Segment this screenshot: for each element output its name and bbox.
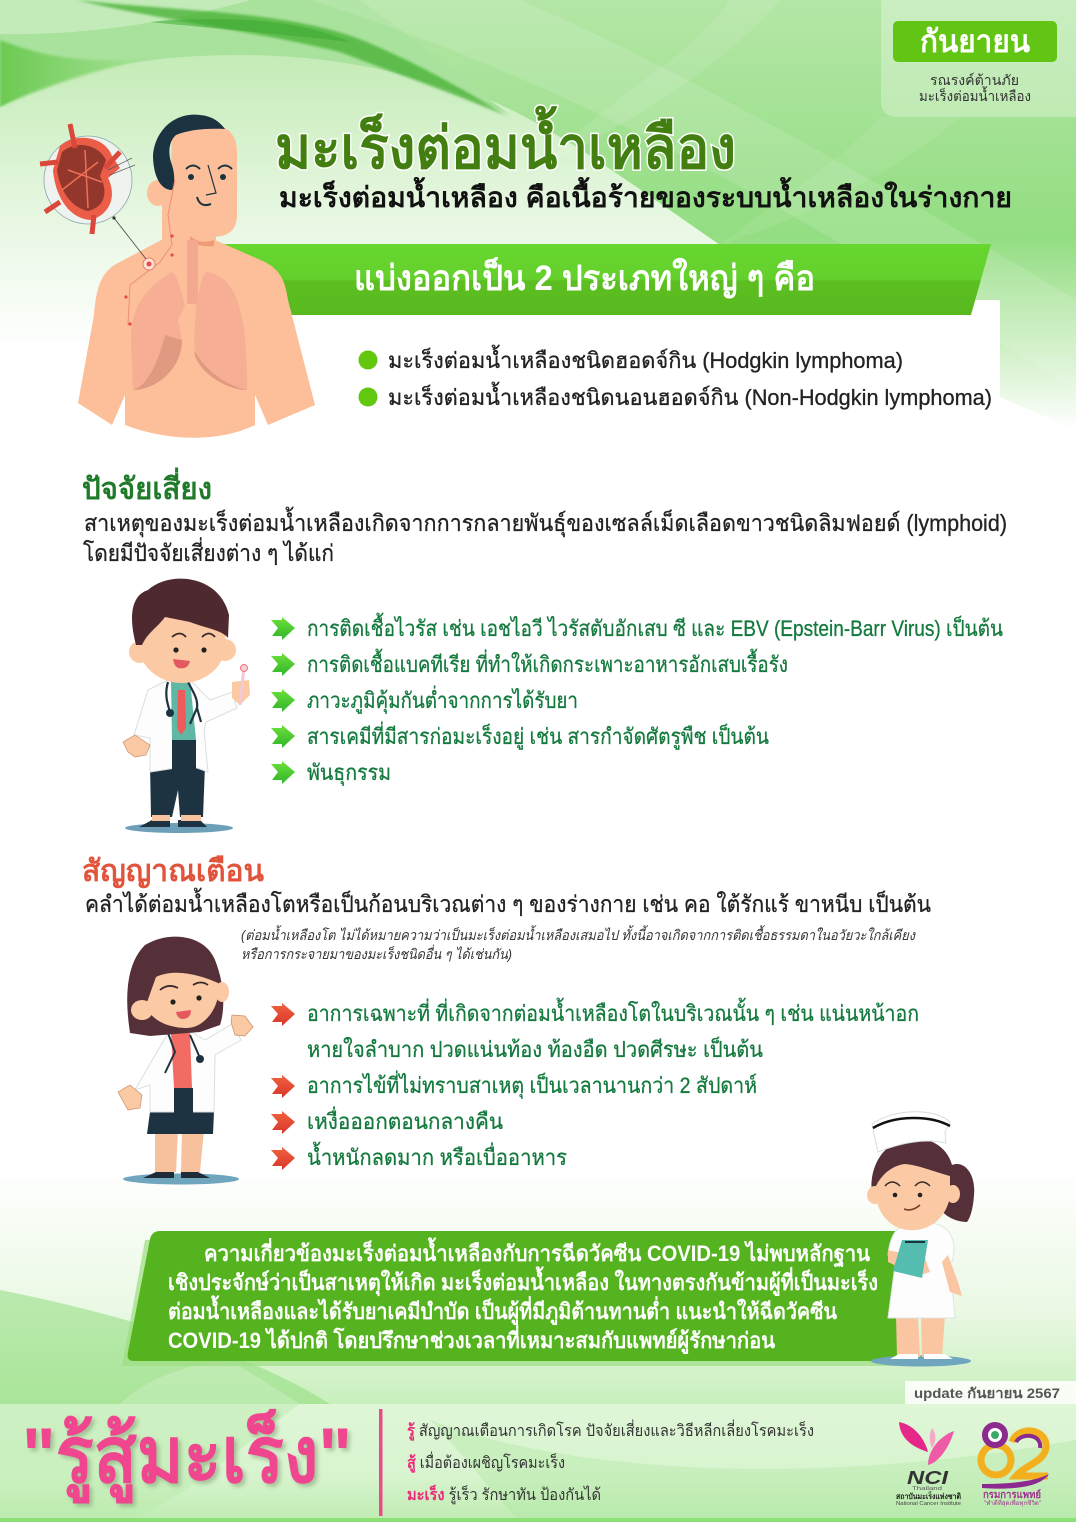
illustration: female doctor bbox=[118, 937, 253, 1184]
slogan: "รู้สู้มะเร็ง" bbox=[22, 1409, 352, 1504]
slogan explanation: สู้ เมื่อต้องเผชิญโรคมะเร็ง bbox=[407, 1451, 565, 1474]
month tab: มะเร็งต่อมน้ำเหลือง bbox=[919, 86, 1031, 104]
warning signs list: อาการเฉพาะที่ ที่เกิดจากต่อมน้ำเหลืองโตในบริเวณนั้น ๆ เช่น แน่นหน้าอก bbox=[307, 998, 919, 1026]
slogan explanation: รู้ สัญญาณเตือนการเกิดโรค ปัจจัยเสี่ยงและวิธีหลีกเลี่ยงโรคมะเร็ง bbox=[407, 1419, 814, 1442]
lymphoma types list: มะเร็งต่อมน้ำเหลืองชนิดนอนฮอดจ์กิน (Non-Hodgkin lymphoma) bbox=[388, 382, 992, 410]
risk factors intro: โดยมีปัจจัยเสี่ยงต่าง ๆ ได้แก่ bbox=[83, 537, 334, 566]
logo: Department of Medical Services 82 bbox=[981, 1425, 1049, 1507]
risk factors list: ภาวะภูมิคุ้มกันต่ำจากการได้รับยา bbox=[307, 685, 578, 714]
subtitle: มะเร็งต่อมน้ำเหลือง คือเนื้อร้ายของระบบน้ำเหลืองในร่างกาย bbox=[279, 176, 1012, 213]
heading: risk factors: ปัจจัยเสี่ยง bbox=[82, 467, 212, 506]
illustration: male doctor bbox=[123, 579, 250, 833]
slogan explanation bbox=[407, 1419, 814, 1505]
warning signs intro: คลำได้ต่อมน้ำเหลืองโตหรือเป็นก้อนบริเวณต่าง ๆ ของร่างกาย เช่น คอ ใต้รักแร้ ขาหนีบ เป็นต้น bbox=[85, 888, 931, 917]
logo: National Cancer Institute: Thailand bbox=[912, 1486, 942, 1492]
warning signs list: น้ำหนักลดมาก หรือเบื่ออาหาร bbox=[307, 1142, 567, 1170]
logo: National Cancer Institute bbox=[896, 1422, 961, 1507]
risk factors list: พันธุกรรม bbox=[307, 760, 391, 786]
callout: COVID-19 vaccine bbox=[122, 1231, 898, 1366]
slogan divider bbox=[379, 1409, 382, 1516]
warning signs list: หายใจลำบาก ปวดแน่นท้อง ท้องอืด ปวดศีรษะ เป็นต้น bbox=[307, 1035, 763, 1062]
callout: COVID-19 vaccine: ความเกี่ยวข้องมะเร็งต่อมน้ำเหลืองกับการฉีดวัคซีน COVID-19 ไม่พบหลักฐาน bbox=[204, 1237, 870, 1268]
warning signs list: เหงื่อออกตอนกลางคืน bbox=[307, 1106, 503, 1134]
warning signs list: อาการไข้ที่ไม่ทราบสาเหตุ เป็นเวลานานกว่า 2 สัปดาห์ bbox=[307, 1070, 757, 1099]
risk factors list: สารเคมีที่มีสารก่อมะเร็งอยู่ เช่น สารกำจัดศัตรูพืช เป็นต้น bbox=[307, 721, 769, 750]
footer band bbox=[0, 1404, 1076, 1522]
warning signs note bbox=[241, 925, 916, 962]
risk factors intro bbox=[83, 507, 1007, 566]
logo: National Cancer Institute: NCI bbox=[907, 1468, 949, 1488]
callout: COVID-19 vaccine: ต่อมน้ำเหลืองและได้รับยาเคมีบำบัด เป็นผู้ที่มีภูมิต้านทานต่ำ แนะนำให้ฉีดวัคซีน bbox=[168, 1295, 837, 1326]
warning signs list bbox=[271, 998, 919, 1170]
month tab bbox=[881, 0, 1076, 117]
title: มะเร็งต่อมน้ำเหลือง bbox=[275, 106, 736, 181]
heading: warning signs: สัญญาณเตือน bbox=[82, 855, 264, 889]
month tab: กันยายน bbox=[920, 24, 1030, 59]
callout: COVID-19 vaccine: เชิงประจักษ์ว่าเป็นสาเหตุให้เกิด มะเร็งต่อมน้ำเหลือง ในทางตรงกันข้ามผู้ที่เป็นมะเร็ง bbox=[168, 1266, 878, 1297]
risk factors list bbox=[271, 613, 1003, 786]
warning signs note: หรือการกระจายมาของมะเร็งชนิดอื่น ๆ ได้เช่นกัน) bbox=[241, 944, 512, 962]
logo: National Cancer Institute: National Cancer Institute bbox=[896, 1501, 961, 1507]
types banner: แบ่งออกเป็น 2 ประเภทใหญ่ ๆ คือ bbox=[354, 256, 815, 299]
update stamp bbox=[905, 1381, 1076, 1404]
logo: Department of Medical Services 82: "ทำดีที่สุดเพื่อทุกชีวิต" bbox=[984, 1499, 1041, 1507]
illustration: man with lungs and lymph node bbox=[40, 115, 315, 438]
white box behind types bbox=[290, 300, 1000, 438]
update stamp: update กันยายน 2567 bbox=[914, 1385, 1060, 1401]
risk factors list: การติดเชื้อแบคทีเรีย ที่ทำให้เกิดกระเพาะอาหารอักเสบเรื้อรัง bbox=[307, 649, 788, 677]
lymphoma types list: มะเร็งต่อมน้ำเหลืองชนิดฮอดจ์กิน (Hodgkin lymphoma) bbox=[388, 345, 903, 373]
logo: Department of Medical Services 82: กรมการแพทย์ bbox=[983, 1489, 1041, 1501]
risk factors intro: สาเหตุของมะเร็งต่อมน้ำเหลืองเกิดจากการกลายพันธุ์ของเซลล์เม็ดเลือดขาวชนิดลิมฟอยด์ (lymphoid) bbox=[84, 507, 1007, 537]
slogan explanation: มะเร็ง รู้เร็ว รักษาทัน ป้องกันได้ bbox=[407, 1483, 601, 1505]
illustration: nurse bbox=[867, 1112, 974, 1366]
slogan: "รู้สู้มะเร็ง" bbox=[25, 1412, 355, 1507]
month tab: รณรงค์ต้านภัย bbox=[930, 72, 1019, 88]
callout: COVID-19 vaccine: COVID-19 ได้ปกติ โดยปรึกษาช่วงเวลาที่เหมาะสมกับแพทย์ผู้รักษาก่อน bbox=[168, 1324, 775, 1355]
logo: National Cancer Institute: สถาบันมะเร็งแห่งชาติ bbox=[896, 1490, 961, 1501]
warning signs note: (ต่อมน้ำเหลืองโต ไม่ได้หมายความว่าเป็นมะเร็งต่อมน้ำเหลืองเสมอไป ทั้งนี้อาจเกิดจากการติดเชื้อธรรมดาในอวัยวะใกล้เคียง bbox=[241, 925, 916, 943]
lymphoma types list bbox=[358, 345, 992, 410]
types banner bbox=[215, 244, 991, 315]
